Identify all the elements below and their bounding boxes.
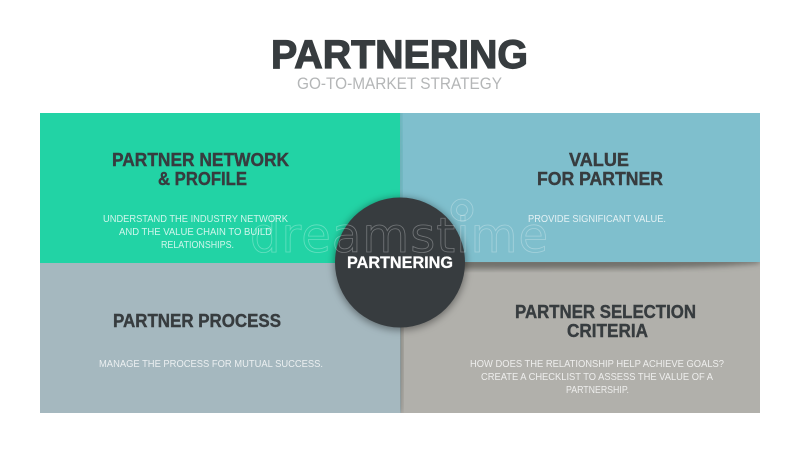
subtitle: GO-TO-MARKET STRATEGY	[297, 74, 502, 93]
text block: partner selection description: HOW DOES THE RELATIONSHIP HELP ACHIEVE GOALS?	[470, 358, 724, 370]
heading: value for partner: FOR PARTNER	[537, 169, 663, 189]
heading: partner selection criteria	[515, 302, 696, 341]
panel: partner process	[40, 263, 401, 413]
text block: partner network description: AND THE VALUE CHAIN TO BUILD	[119, 226, 272, 238]
text block: partner network description	[103, 213, 288, 251]
panel: partner network and profile	[40, 113, 400, 263]
heading: partner network and profile: PARTNER NETWORK	[112, 150, 289, 170]
infographic canvas	[40, 39, 760, 413]
title: PARTNERING	[271, 33, 528, 77]
heading: value for partner	[537, 150, 663, 189]
text block: partner network description: RELATIONSHIPS.	[161, 239, 234, 251]
text block: partner selection description: PARTNERSHIP.	[566, 384, 629, 396]
heading: partner selection criteria: CRITERIA	[567, 321, 648, 341]
watermark: dreamstime	[250, 208, 548, 264]
heading: partner process: PARTNER PROCESS	[113, 311, 281, 331]
heading: value for partner: VALUE	[569, 150, 629, 170]
text block: partner selection description: CREATE A CHECKLIST TO ASSESS THE VALUE OF A	[481, 371, 713, 383]
panel: partner selection criteria	[396, 258, 760, 413]
text block: partner process description: MANAGE THE PROCESS FOR MUTUAL SUCCESS.	[99, 358, 323, 370]
heading: partner selection criteria: PARTNER SELECTION	[515, 302, 696, 322]
panel: value for partner	[394, 108, 760, 262]
text block: partner selection description	[470, 358, 724, 396]
center circle	[334, 198, 466, 330]
text block: partner network description: UNDERSTAND THE INDUSTRY NETWORK	[103, 213, 288, 225]
text block: value description: PROVIDE SIGNIFICANT VALUE.	[528, 213, 666, 225]
heading: partner network and profile: & PROFILE	[158, 169, 247, 189]
heading: partner network and profile	[112, 150, 289, 189]
center label: PARTNERING	[347, 253, 453, 272]
